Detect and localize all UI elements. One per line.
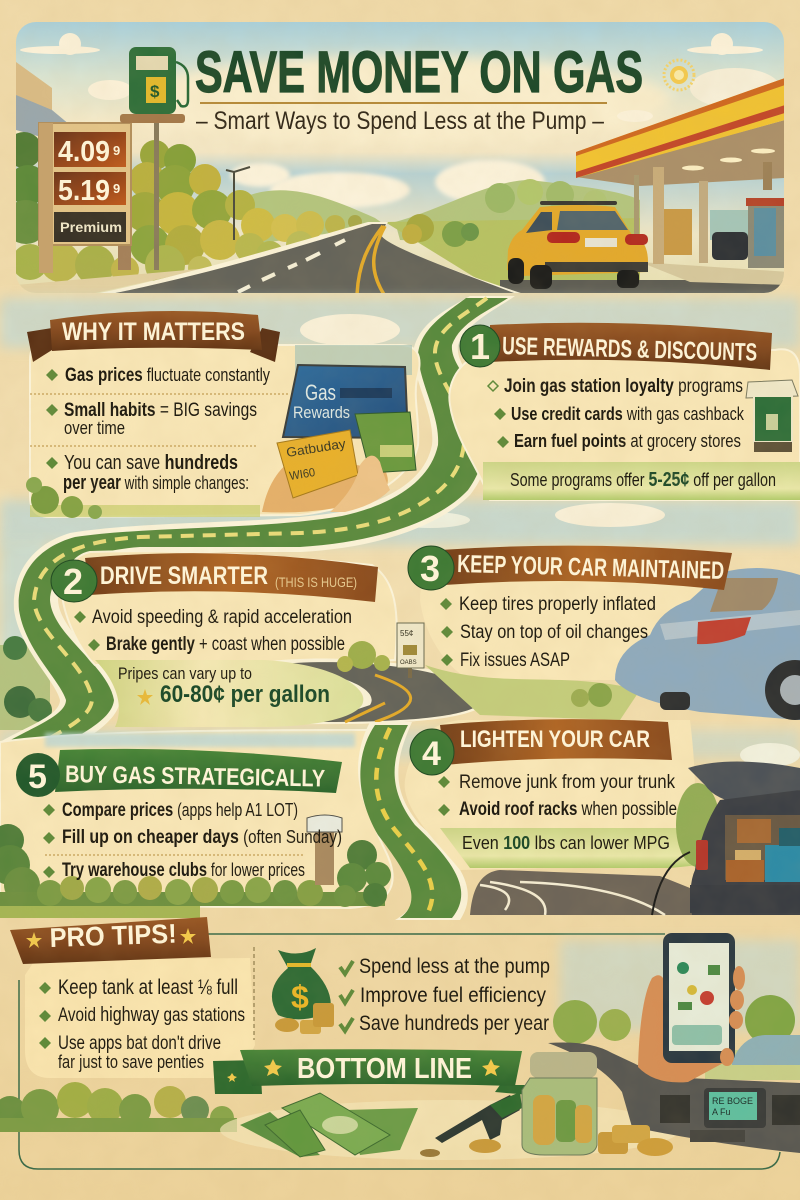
- panel: buy gas strategically: [0, 730, 393, 918]
- bullets: Keep tires properly inflated: [459, 594, 656, 615]
- meadow: [387, 218, 640, 286]
- bullets: pro tips: Avoid highway gas stations: [58, 1004, 245, 1026]
- bullets: Avoid roof racks when possible: [459, 799, 677, 820]
- price sign: [39, 123, 131, 273]
- bullets: Small habits = BIG savings: [64, 400, 257, 421]
- bullets: pro tips: Keep tank at least ⅛ full: [58, 976, 238, 999]
- section heading: BUY GAS STRATEGICALLY: [65, 761, 325, 793]
- checklist: [340, 955, 550, 1035]
- icon: sun: [664, 60, 694, 90]
- grass at left of section 2: [0, 636, 52, 730]
- callout box: [483, 462, 800, 500]
- landscape right: [553, 995, 800, 1080]
- icon: star: [137, 689, 153, 705]
- silver car: [615, 568, 800, 720]
- yellow car: [507, 201, 648, 289]
- price sign: 4.09: [58, 136, 110, 168]
- checklist: Improve fuel efficiency: [360, 984, 546, 1007]
- price sign: Premium: [60, 219, 122, 235]
- winding road: upper and left: [0, 296, 515, 792]
- number badge 2: 2: [63, 561, 83, 602]
- number badge 3: [408, 546, 454, 590]
- divider: [253, 947, 255, 1040]
- bullets: pro tips: [39, 976, 245, 1072]
- bullets: pro tips: far just to save penties: [58, 1052, 204, 1072]
- bullets: per year with simple changes:: [63, 472, 249, 494]
- panel: drive smarter: [51, 551, 488, 727]
- subtitle: – Smart Ways to Spend Less at the Pump –: [196, 107, 604, 135]
- icon: roadside price sign: [397, 623, 424, 678]
- checklist: Save hundreds per year: [359, 1012, 549, 1035]
- rewards cards in hand: Gas: [305, 380, 336, 405]
- banner: bottom line: BOTTOM LINE: [297, 1053, 472, 1085]
- bullets: Avoid speeding & rapid acceleration: [92, 607, 352, 628]
- banner: why it matters: WHY IT MATTERS: [62, 318, 245, 346]
- icon: money bag: [272, 948, 334, 1034]
- bullets: pro tips: Use apps bat don't drive: [58, 1033, 221, 1054]
- asphalt curve: [260, 658, 488, 724]
- price sign: 5.19: [58, 175, 110, 207]
- bullets: Fill up on cheaper days (often Sunday): [62, 827, 342, 848]
- icon: coin jar: [522, 1052, 673, 1156]
- callout text: Some programs offer 5-25¢ off per gallon: [510, 469, 776, 491]
- bullets: [30, 365, 288, 494]
- price sign: 9: [113, 181, 120, 196]
- cash pile: [240, 1093, 418, 1157]
- gas station canopy: [576, 78, 785, 268]
- panel: keep your car maintained: [408, 546, 800, 720]
- bullets: Compare prices (apps help A1 LOT): [62, 800, 298, 821]
- checklist: Spend less at the pump: [359, 955, 550, 978]
- icon: fuel nozzle: [420, 1092, 522, 1157]
- building at left: [16, 62, 66, 136]
- icon: small station sign: [746, 380, 798, 452]
- bullets: [74, 607, 352, 655]
- price sign: 9: [113, 143, 120, 158]
- section heading: LIGHTEN YOUR CAR: [460, 726, 650, 753]
- banner: bottom line: [213, 1049, 535, 1095]
- car with open trunk: [688, 762, 800, 915]
- bullets: [440, 594, 656, 671]
- banner: [440, 719, 672, 765]
- tree line: [0, 1082, 237, 1132]
- number badge 1: 1: [470, 326, 490, 367]
- frame: [19, 934, 780, 1169]
- callout text: Pripes can vary up to: [118, 664, 252, 683]
- bullets: over time: [64, 418, 125, 438]
- dashboard: A Fu: [712, 1107, 731, 1117]
- bullets: [438, 772, 677, 820]
- number badge 2: [51, 560, 97, 602]
- bushes and grass: [0, 824, 391, 918]
- dashboard: RE BOGE: [712, 1096, 753, 1106]
- title rule: [200, 102, 607, 104]
- road sign post: [307, 815, 342, 885]
- bullets: [43, 800, 342, 881]
- banner: [55, 749, 342, 793]
- panel: lighten your car: [405, 719, 800, 915]
- bullets: Stay on top of oil changes: [460, 622, 648, 643]
- panel: use rewards and discounts: [449, 323, 800, 500]
- street lamp: [226, 167, 250, 240]
- bullets: Remove junk from your trunk: [459, 772, 675, 793]
- rewards cards in hand: WI60: [288, 465, 316, 483]
- heading note: (THIS IS HUGE): [275, 574, 357, 590]
- hills: [251, 180, 640, 242]
- sky washes between sections: [0, 298, 800, 767]
- bushes: [26, 477, 260, 519]
- rewards cards in hand: [262, 345, 416, 512]
- bullets: Join gas station loyalty programs: [504, 376, 743, 397]
- roadside bush: [337, 641, 390, 672]
- right sky wash: [560, 940, 800, 1030]
- dashboard: [548, 1042, 800, 1153]
- road: [85, 222, 790, 296]
- tips panel: [25, 958, 255, 1078]
- number badge 4: 4: [422, 735, 441, 773]
- bullets: Fix issues ASAP: [460, 650, 570, 671]
- icon: roadside price sign: OABS: [400, 660, 417, 666]
- number badge 5: [16, 753, 60, 797]
- icon: roadside price sign: 55¢: [400, 629, 413, 638]
- bullets: Try warehouse clubs for lower prices: [62, 860, 305, 881]
- number badge 1: [460, 325, 500, 367]
- trees left: [4, 132, 362, 285]
- number badge 4: [410, 729, 454, 775]
- bullets: Brake gently + coast when possible: [106, 634, 345, 655]
- pump pole: [154, 123, 159, 270]
- banner: [440, 546, 732, 590]
- ground strip: [16, 268, 210, 293]
- bullets: Earn fuel points at grocery stores: [514, 431, 741, 451]
- number badge 5: 5: [28, 758, 47, 796]
- icon: gas pump: [120, 47, 188, 123]
- hero illustration panel: [4, 22, 790, 296]
- callout text: Even 100 lbs can lower MPG: [462, 833, 670, 853]
- roadside bush: [571, 683, 612, 707]
- section heading: DRIVE SMARTER: [100, 562, 268, 590]
- panel: why it matters: [26, 311, 420, 519]
- winding road: lower: [358, 722, 468, 920]
- icon: gas pump: $: [150, 82, 160, 101]
- banner: pro tips: [10, 917, 211, 964]
- bullets: Gas prices fluctuate constantly: [65, 365, 270, 386]
- callout figure: 60-80¢ per gallon: [160, 681, 330, 708]
- bullets: You can save hundreds: [64, 452, 238, 474]
- rewards cards in hand: Gatbuday: [285, 436, 347, 460]
- banner: [490, 323, 772, 370]
- banner: pro tips: PRO TIPS!: [49, 919, 177, 953]
- callout box: [440, 828, 700, 868]
- grass and asphalt: [470, 783, 720, 915]
- grass edge: [425, 665, 640, 720]
- callout box: [95, 660, 363, 727]
- icon: phone in hand: [638, 933, 745, 1082]
- fuel cable: [652, 852, 690, 915]
- banner: [85, 553, 378, 602]
- banner: why it matters: [27, 311, 280, 362]
- number badge 3: 3: [420, 548, 440, 589]
- bullets: Use credit cards with gas cashback: [511, 404, 745, 424]
- bullets: [488, 376, 745, 451]
- panel: pro tips and bottom line: [0, 917, 800, 1169]
- ground wash: [220, 1100, 680, 1160]
- rewards cards in hand: Rewards: [293, 403, 350, 422]
- icon: money bag: $: [291, 979, 309, 1015]
- trees right: [402, 179, 607, 247]
